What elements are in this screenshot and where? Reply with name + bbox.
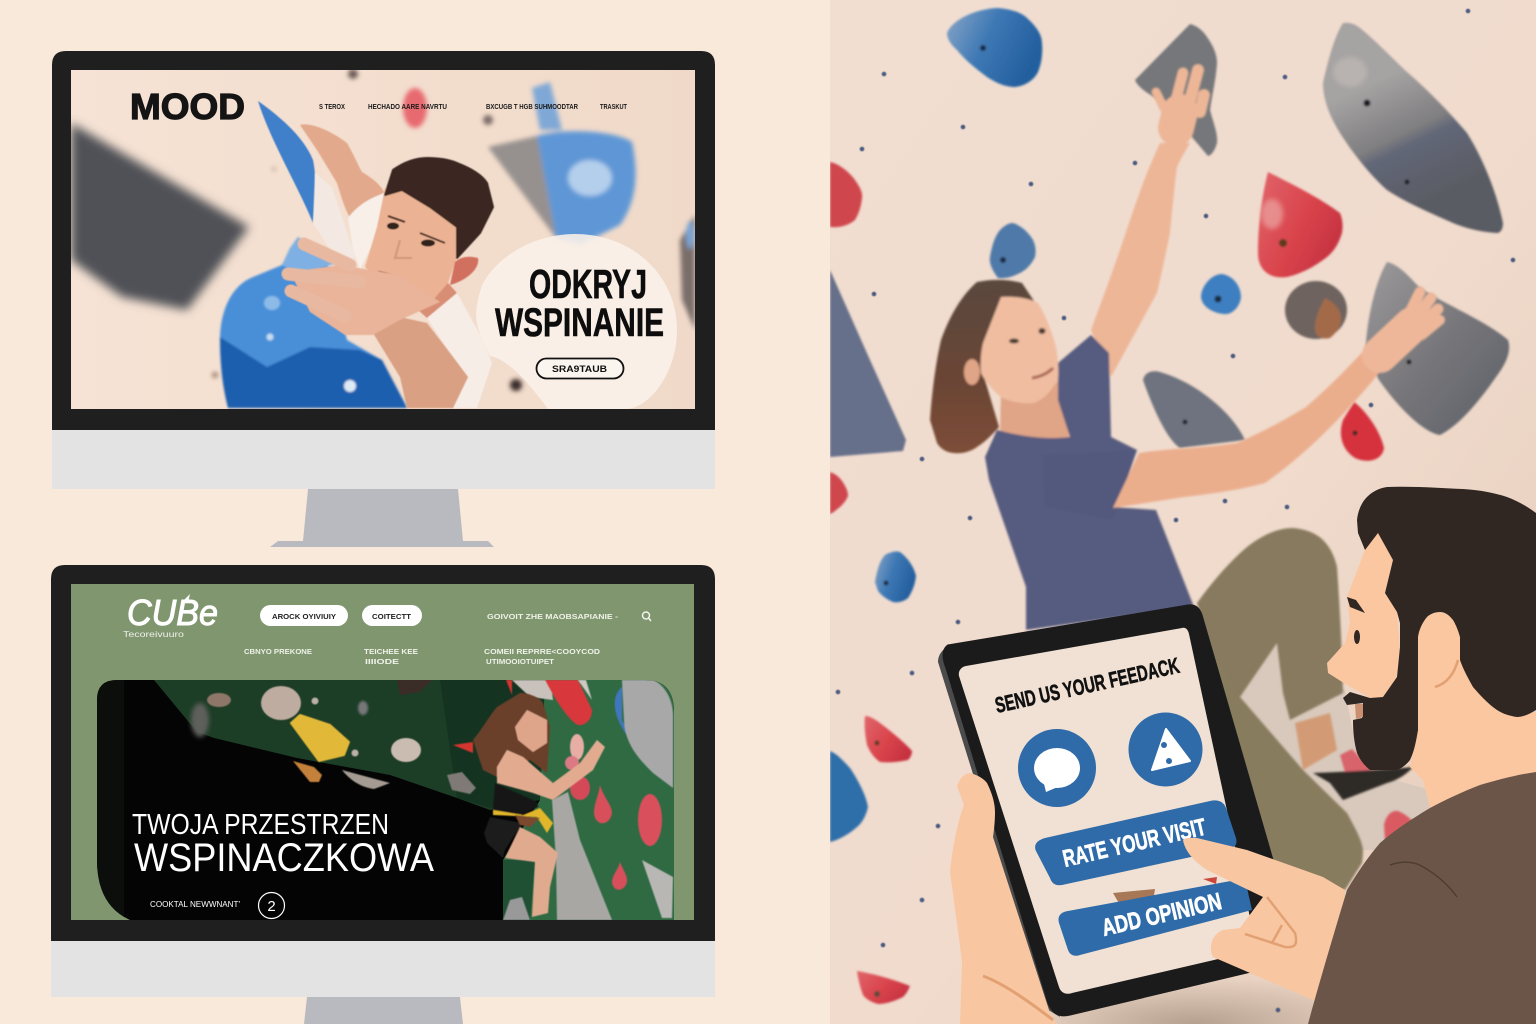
hold: red mid <box>865 716 912 762</box>
logo: CUBe <box>127 592 218 633</box>
left background panel <box>0 0 830 1024</box>
hold: grey triangle <box>830 270 906 457</box>
climber shoe <box>1313 767 1413 800</box>
climber upper hand <box>1156 70 1204 128</box>
man face <box>1327 533 1400 698</box>
headline <box>494 269 664 337</box>
button: add opinion <box>1058 877 1252 956</box>
navigation: TRASKUT <box>600 102 627 111</box>
hold: red bottom <box>857 971 910 1004</box>
hold: blue top <box>947 8 1042 87</box>
hero headline: TWOJA PRZESTRZEN <box>132 809 389 841</box>
panel: bottom monitor with CUBE website <box>51 565 715 1024</box>
hold: red drop <box>1341 402 1384 461</box>
navigation links: GOIVOIT ZHE MAOBSAPIANIE - <box>487 612 619 621</box>
climber neck <box>1000 375 1070 440</box>
climber reaching arm <box>1113 347 1379 508</box>
right hand pointing <box>1183 838 1345 1010</box>
navigation: S TEROX <box>319 102 345 111</box>
hero link: COOKTAL NEWWNANT' <box>150 900 240 909</box>
hold: blue lower <box>875 551 916 602</box>
monitor bezel <box>51 565 715 941</box>
logo: Tecoreivuuro <box>123 630 185 639</box>
climber hand and forearm <box>288 244 468 408</box>
climber shirt <box>985 335 1194 630</box>
climber <box>473 693 605 917</box>
headline: WSPINANIE <box>495 301 664 345</box>
man neck and ear <box>1410 612 1536 808</box>
navigation links: CBNYO PREKONE <box>244 647 312 656</box>
logo: MOOD <box>130 86 245 127</box>
button: SRA9TAUB <box>552 364 608 374</box>
nav pills <box>260 605 422 626</box>
tablet screen <box>959 628 1257 994</box>
button: rate your visit <box>1035 800 1237 885</box>
climber hair <box>930 280 1050 453</box>
climber raised arm <box>1091 143 1190 377</box>
panel: climbing wall scene <box>830 0 1536 1024</box>
left hand holding tablet <box>950 773 1057 1024</box>
climber trousers <box>1197 528 1343 720</box>
hold: brown <box>1285 281 1347 339</box>
hold: grey middle <box>1143 371 1245 448</box>
shirt seam <box>1390 862 1457 897</box>
button: rate your visit: RATE YOUR VISIT <box>1060 814 1209 873</box>
climber face <box>981 297 1058 403</box>
monitor stand <box>304 997 463 1024</box>
climber hand <box>1380 292 1440 355</box>
hero photo <box>97 680 674 920</box>
hero headline: WSPINACZKOWA <box>134 836 434 880</box>
hold: blue bottom left <box>830 751 868 842</box>
hold: grey under hand <box>1366 262 1509 435</box>
hold: blue round <box>1201 274 1241 314</box>
hold: blue small <box>990 223 1036 278</box>
nav pills: AROCK OYIVIUIY <box>272 612 336 621</box>
nav pills: COITECTT <box>372 612 411 621</box>
page indicator <box>258 892 284 918</box>
translucent headline bubble <box>476 234 677 409</box>
dark green wall <box>154 680 545 810</box>
button <box>536 358 624 378</box>
man ear crease <box>1435 660 1458 687</box>
climber facial features <box>964 328 1053 385</box>
panel: top monitor with MOOD website <box>52 51 715 547</box>
climber far ankle <box>1295 713 1337 770</box>
wall shadow near floor <box>1050 984 1314 1024</box>
navigation links: UTIMOOIOTUIPET <box>486 657 554 666</box>
icon: warning triangle <box>1128 712 1202 786</box>
climbing holds <box>830 8 1509 1004</box>
website screen: CUBE <box>71 584 694 920</box>
icon: speech bubble <box>1018 729 1096 807</box>
lit green wall <box>503 680 674 920</box>
tablet body <box>944 606 1272 1015</box>
climber <box>930 70 1440 890</box>
hold: red left <box>830 162 862 227</box>
navigation <box>319 104 627 109</box>
button: add opinion: ADD OPINION <box>1099 888 1224 942</box>
navigation links: COMEII REPRRE<COOYCOD <box>484 647 601 656</box>
hold: red right <box>1384 811 1413 841</box>
blurred grey hold <box>71 123 249 310</box>
hold: red lower left <box>830 472 848 514</box>
navigation links: TEICHEE KEE <box>364 647 418 656</box>
man shirt <box>1308 772 1536 1024</box>
bolt holes <box>836 9 1515 1012</box>
man hair and beard <box>1343 487 1536 770</box>
website screen: MOOD <box>71 69 695 409</box>
page indicator: 2 <box>267 898 276 915</box>
monitor chin <box>52 430 715 489</box>
man illustration <box>1308 487 1536 1024</box>
monitor bezel <box>52 51 715 430</box>
hero headline <box>132 814 434 872</box>
climber <box>300 124 493 408</box>
blue hold top <box>258 101 316 223</box>
large blue hold <box>220 237 407 408</box>
navigation links: IIIIODE <box>365 657 399 666</box>
wall shade behind legs <box>1230 640 1430 850</box>
tablet side edge <box>938 646 1060 1017</box>
climbing holds <box>191 680 673 920</box>
man eyebrow and eye <box>1347 597 1365 644</box>
navigation links <box>244 612 619 666</box>
navigation: BXCUGB T HGB SUHMOODTAR <box>486 102 578 111</box>
wall background <box>830 0 1536 1024</box>
monitor stand <box>270 489 494 547</box>
blurred wall background <box>212 69 695 391</box>
headline: ODKRYJ <box>529 261 647 307</box>
hold: red <box>1258 172 1343 277</box>
monitor chin <box>51 941 715 997</box>
tablet <box>938 606 1272 1017</box>
feedback heading: SEND US YOUR FEEDACK <box>993 653 1182 718</box>
hold: large grey <box>1323 23 1503 233</box>
lip patch <box>1355 704 1363 719</box>
navigation: HECHADO AARE NAVRTU <box>368 102 447 111</box>
hold: grey top <box>1135 24 1217 156</box>
icon: search <box>642 612 651 621</box>
